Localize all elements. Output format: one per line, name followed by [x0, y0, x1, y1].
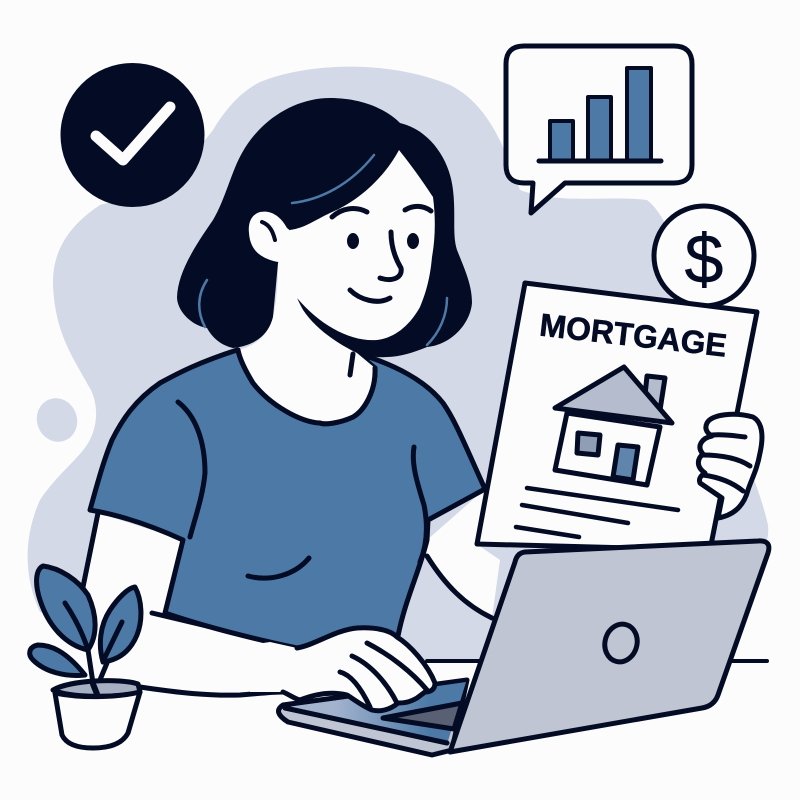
hair highlights — [199, 155, 447, 345]
left arm outline — [83, 513, 300, 695]
right arm outline — [427, 556, 492, 618]
table line — [427, 659, 767, 663]
left arm — [83, 513, 300, 702]
laptop keyboard — [383, 703, 462, 729]
eyebrows — [332, 206, 431, 217]
document text lines — [516, 488, 678, 537]
icon: dollar coin: $ — [685, 220, 723, 298]
icon: house — [555, 367, 672, 485]
plant leaves — [30, 566, 141, 687]
collar line — [238, 350, 375, 424]
laptop base — [279, 680, 467, 755]
eyes — [347, 233, 359, 249]
icon: dollar coin — [654, 206, 754, 306]
heading: mortgage: MORTGAGE — [538, 307, 729, 364]
background blob — [28, 67, 768, 660]
hand holding document — [698, 414, 762, 518]
ear — [249, 212, 292, 262]
shirt — [90, 350, 485, 648]
neck crease — [350, 354, 353, 375]
small blob circle — [31, 392, 83, 448]
laptop deck front edge — [285, 708, 447, 743]
plant pot — [53, 681, 140, 748]
laptop — [279, 541, 769, 755]
hair — [177, 98, 472, 365]
smile — [350, 290, 390, 301]
nose — [380, 232, 401, 280]
icon: check badge — [60, 63, 204, 207]
potted plant — [30, 566, 141, 748]
table area below table line — [420, 661, 500, 700]
face and neck — [238, 150, 435, 424]
laptop screen — [450, 541, 769, 752]
laptop deck — [290, 682, 466, 741]
speech bubble with bar chart — [506, 46, 692, 213]
right arm — [425, 489, 500, 618]
mortgage document — [477, 283, 757, 550]
typing hand — [250, 628, 435, 711]
laptop logo — [601, 621, 641, 665]
